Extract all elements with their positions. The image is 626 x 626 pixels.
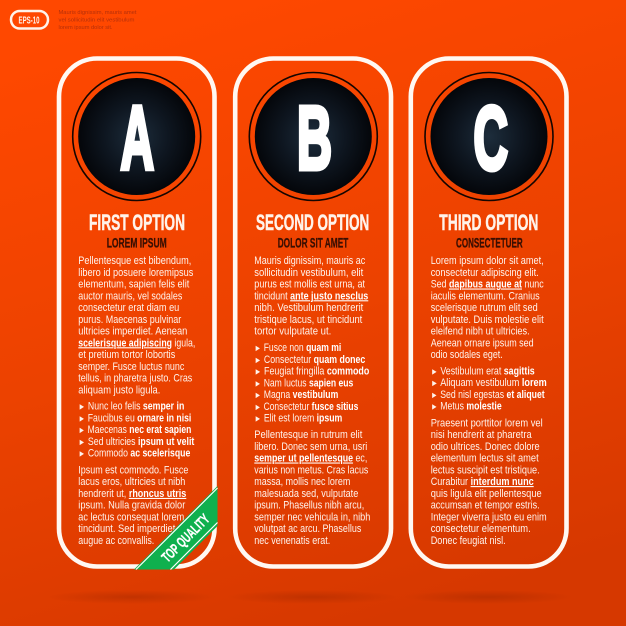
text block: closing A: Ipsum est commodo. Fusce bbox=[78, 464, 188, 476]
bullet list B bbox=[254, 342, 370, 424]
text block: intro B: sollicitudin vestibulum, elit bbox=[254, 267, 363, 279]
bullet list C: ► Aliquam vestibulum lorem bbox=[431, 377, 547, 389]
text block: intro A: tellus, in pharetra justo. Cras bbox=[78, 372, 193, 384]
text block: closing C: consectetur elementum. bbox=[431, 523, 531, 535]
heading: third option: THIRD OPTION bbox=[439, 210, 538, 235]
text block: intro A: Pellentesque est bibendum, bbox=[78, 255, 191, 267]
text block: closing C: Curabitur interdum nunc bbox=[431, 476, 534, 488]
floor shadow A bbox=[47, 590, 217, 604]
bullet list A: ► Faucibus eu ornare in nisi bbox=[78, 412, 191, 424]
bullet list C bbox=[431, 365, 547, 413]
text block: intro A bbox=[78, 255, 195, 396]
text block: closing B: libero. Donec sem urna, usri bbox=[254, 441, 367, 453]
text block: intro C: Sed dapibus augue at nunc bbox=[431, 278, 544, 290]
text block: closing A: lacus eros, ultricies ut nibh bbox=[78, 476, 185, 488]
bullet list A bbox=[78, 401, 195, 460]
bullet list B: ► Elit est lorem ipsum bbox=[254, 412, 343, 424]
bullet list A: ► Sed ultricies ipsum ut velit bbox=[78, 436, 195, 448]
text block: intro A: scelerisque adipiscing igula, bbox=[78, 337, 195, 349]
text block: intro A: libero id posuere loremipsus bbox=[78, 267, 194, 279]
text block: intro B: tristique lacus, ut tincidunt bbox=[254, 314, 362, 326]
text block: intro B: tortor vulputate ut. bbox=[254, 326, 331, 338]
floor shadow C bbox=[403, 590, 573, 604]
small header note: Mauris dignissim, mauris amet bbox=[58, 10, 137, 16]
subheading: lorem ipsum: LOREM IPSUM bbox=[107, 234, 167, 250]
bullet list A: ► Nunc leo felis semper in bbox=[78, 401, 184, 413]
small header note: lorem ipsum dolor sit. bbox=[58, 25, 113, 31]
bullet list B: ► Consectetur fusce sitius bbox=[254, 401, 358, 413]
text block: closing B: Pellentesque in rutrum elit bbox=[254, 429, 362, 441]
badge: EPS-10: EPS-10 bbox=[18, 16, 40, 26]
text block: closing B: semper ut pellentesque ec, bbox=[254, 452, 367, 464]
text block: intro C: scelerisque rutrum elit sed bbox=[431, 302, 538, 314]
text block: intro C: consectetur adipiscing elit. bbox=[431, 267, 539, 279]
text block: intro C: odio sodales eget. bbox=[431, 349, 503, 361]
text block: intro B: Mauris dignissim, mauris ac bbox=[254, 255, 366, 267]
bullet list A: ► Maecenas nec erat sapien bbox=[78, 424, 191, 436]
panel: option C bbox=[411, 58, 566, 566]
subheading: dolor sit amet: DOLOR SIT AMET bbox=[278, 234, 349, 250]
small header note bbox=[58, 10, 137, 31]
text block: intro B: purus est mollis est urna, at bbox=[254, 278, 365, 290]
text block: closing A: tincidunt. Sed imperdiet bbox=[78, 523, 175, 535]
text block: intro A: et pretium tortor lobortis bbox=[78, 349, 176, 361]
bullet list B: ► Consectetur quam donec bbox=[254, 354, 365, 366]
bullet list C: ► Metus molestie bbox=[431, 401, 502, 413]
text block: closing B: ipsum. Phasellus nibh arcu, bbox=[254, 500, 364, 512]
text block: intro C: Lorem ipsum dolor sit amet, bbox=[431, 255, 544, 267]
bullet list A: ► Commodo ac scelerisque bbox=[78, 448, 190, 460]
text block: closing C: Praesent porttitor lorem vel bbox=[431, 417, 543, 429]
text block: closing B: nec venenatis erat. bbox=[254, 535, 330, 547]
text block: intro A: semper. Fusce luctus nunc bbox=[78, 361, 185, 373]
text block: closing B: varius non metus. Cras lacus bbox=[254, 464, 369, 476]
ribbon: top quality bbox=[134, 486, 218, 570]
text block: intro C: vulputate. Duis molestie elit bbox=[431, 314, 544, 326]
bullet list B: ► Nam luctus sapien eus bbox=[254, 377, 353, 389]
text block: closing C: Donec feugiat nisl. bbox=[431, 535, 506, 547]
icon: letter C disc bbox=[425, 72, 553, 200]
text block: intro A: auctor mauris, vel sodales bbox=[78, 290, 183, 302]
text block: intro A: purus. Maecenas pulvinar bbox=[78, 314, 182, 326]
bullet list B: ► Feugiat fringilla commodo bbox=[254, 366, 370, 378]
badge: EPS-10 bbox=[11, 11, 48, 28]
subheading: consectetuer: CONSECTETUER bbox=[456, 234, 523, 250]
text block: intro B: nibh. Vestibulum hendrerit bbox=[254, 302, 363, 314]
text block: closing B: volutpat ac arcu. Phasellus bbox=[254, 523, 362, 535]
text block: closing A: augue ac convallis. bbox=[78, 535, 154, 547]
text block: intro B: tincidunt ante justo nesclus bbox=[254, 290, 368, 302]
bullet list B: ► Magna vestibulum bbox=[254, 389, 339, 401]
text block: closing B: massa, mollis nec lorem bbox=[254, 476, 350, 488]
icon: letter A disc: A bbox=[120, 89, 154, 189]
text block: intro C: iaculis elementum. Cranius bbox=[431, 290, 540, 302]
text block: intro A: elementum, sapien felis elit bbox=[78, 278, 189, 290]
text block: closing A bbox=[78, 464, 188, 547]
text block: closing B: malesuada sed, vulputate bbox=[254, 488, 358, 500]
text block: closing B bbox=[254, 429, 370, 547]
panel: option A bbox=[59, 58, 218, 570]
small header note: vel sollicitudin elit vestibulum bbox=[58, 18, 135, 24]
text block: intro A: aliquam justo ligula. bbox=[78, 384, 160, 396]
panel: option B bbox=[235, 58, 391, 566]
text block: closing C: Integer viverra justo eu enim bbox=[431, 511, 547, 523]
bullet list C: ► Sed nisl egestas et aliquet bbox=[431, 389, 545, 401]
bullet list C: ► Vestibulum erat sagittis bbox=[431, 365, 535, 377]
text block: intro C: eleifend nibh ut ultricies. bbox=[431, 326, 530, 338]
bullet list B: ► Fusce non quam mi bbox=[254, 342, 341, 354]
icon: letter C disc: C bbox=[474, 89, 508, 189]
heading: first option: FIRST OPTION bbox=[89, 210, 185, 235]
text block: closing C: lectus suscipit est tristique. bbox=[431, 464, 540, 476]
text block: closing C: accumsan et tempor estris. bbox=[431, 500, 540, 512]
floor shadow B bbox=[227, 590, 397, 604]
text block: intro C bbox=[431, 255, 544, 361]
text block: intro A: ultricies imperdiet. Aenean bbox=[78, 326, 187, 338]
text block: intro C: Aenean ornare ipsum sed bbox=[431, 337, 534, 349]
text block: closing A: ipsum. Nulla gravida dolor bbox=[78, 500, 186, 512]
text block: closing C: elementum lectus sit amet bbox=[431, 453, 539, 465]
text block: closing C: odio ultrices. Donec dolore bbox=[431, 441, 540, 453]
text block: closing A: ac lectus consequat lorem bbox=[78, 511, 184, 523]
icon: letter B disc: B bbox=[297, 89, 332, 189]
text block: closing A: hendrerit ut, rhoncus utris bbox=[78, 488, 186, 500]
text block: closing B: semper nec vehicula in, nibh bbox=[254, 511, 370, 523]
text block: closing C: nisi hendrerit at pharetra bbox=[431, 429, 532, 441]
text block: closing C bbox=[431, 417, 547, 547]
text block: intro A: consectetur erat diam eu bbox=[78, 302, 179, 314]
icon: letter B disc bbox=[249, 72, 377, 200]
text block: closing C: quis ligula elit pellentesque bbox=[431, 488, 542, 500]
heading: second option: SECOND OPTION bbox=[256, 210, 369, 235]
text block: intro B bbox=[254, 255, 368, 338]
icon: letter A disc bbox=[73, 72, 201, 200]
ribbon: top quality: TOP QUALITY bbox=[159, 511, 214, 566]
